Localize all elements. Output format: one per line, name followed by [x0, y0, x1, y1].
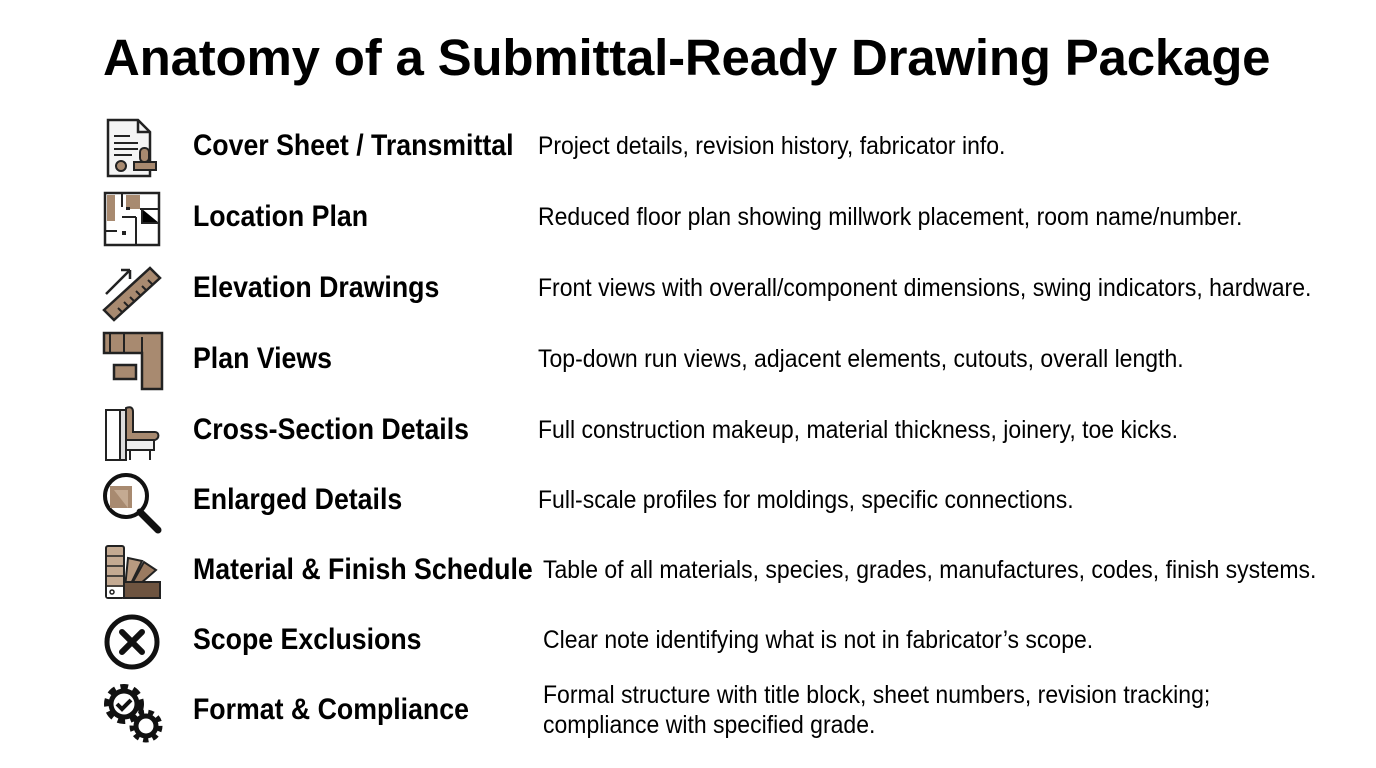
label: Enlarged Details [193, 483, 402, 516]
description: Table of all materials, species, grades, manufactures, codes, finish systems. [543, 556, 1316, 584]
description [543, 681, 1210, 739]
description: compliance with specified grade. [543, 711, 875, 739]
label: Material & Finish Schedule [193, 553, 533, 586]
icon: x circle [104, 614, 160, 670]
label: Location Plan [193, 200, 368, 233]
description: Full construction makeup, material thickness, joinery, toe kicks. [538, 416, 1178, 444]
row: material schedule [105, 545, 1316, 599]
label: Cross-Section Details [193, 413, 469, 446]
label: Cover Sheet / Transmittal [193, 129, 514, 162]
row: scope exclusions [104, 614, 1093, 670]
label: Plan Views [193, 342, 332, 375]
description: Formal structure with title block, sheet numbers, revision tracking; [543, 681, 1210, 709]
row: cover sheet [106, 118, 1005, 178]
description: Project details, revision history, fabricator info. [538, 132, 1005, 160]
label: Scope Exclusions [193, 623, 422, 656]
icon: document with stamp [106, 118, 157, 178]
description: Top-down run views, adjacent elements, cutouts, overall length. [538, 345, 1184, 373]
icon: ruler with arrow [102, 266, 162, 322]
row: location plan [104, 192, 1242, 246]
row: plan views [102, 332, 1184, 390]
description: Front views with overall/component dimensions, swing indicators, hardware. [538, 274, 1311, 302]
title: Anatomy of a Submittal-Ready Drawing Package [103, 29, 1270, 86]
description: Clear note identifying what is not in fabricator’s scope. [543, 626, 1093, 654]
icon: section drawing [105, 406, 160, 461]
icon: swatch fan [105, 545, 161, 599]
row: cross-section [105, 406, 1178, 461]
row: elevation [102, 266, 1311, 322]
description: Full-scale profiles for moldings, specific connections. [538, 486, 1074, 514]
icon: magnifier [103, 473, 162, 534]
row: enlarged details [103, 473, 1074, 534]
label: Format & Compliance [193, 693, 469, 726]
icon: floor plan [104, 192, 160, 246]
icon: L-shaped counter [102, 332, 164, 390]
description: Reduced floor plan showing millwork placement, room name/number. [538, 203, 1242, 231]
icon: gears with check [104, 684, 162, 742]
label: Elevation Drawings [193, 271, 439, 304]
row: format compliance [104, 681, 1210, 742]
